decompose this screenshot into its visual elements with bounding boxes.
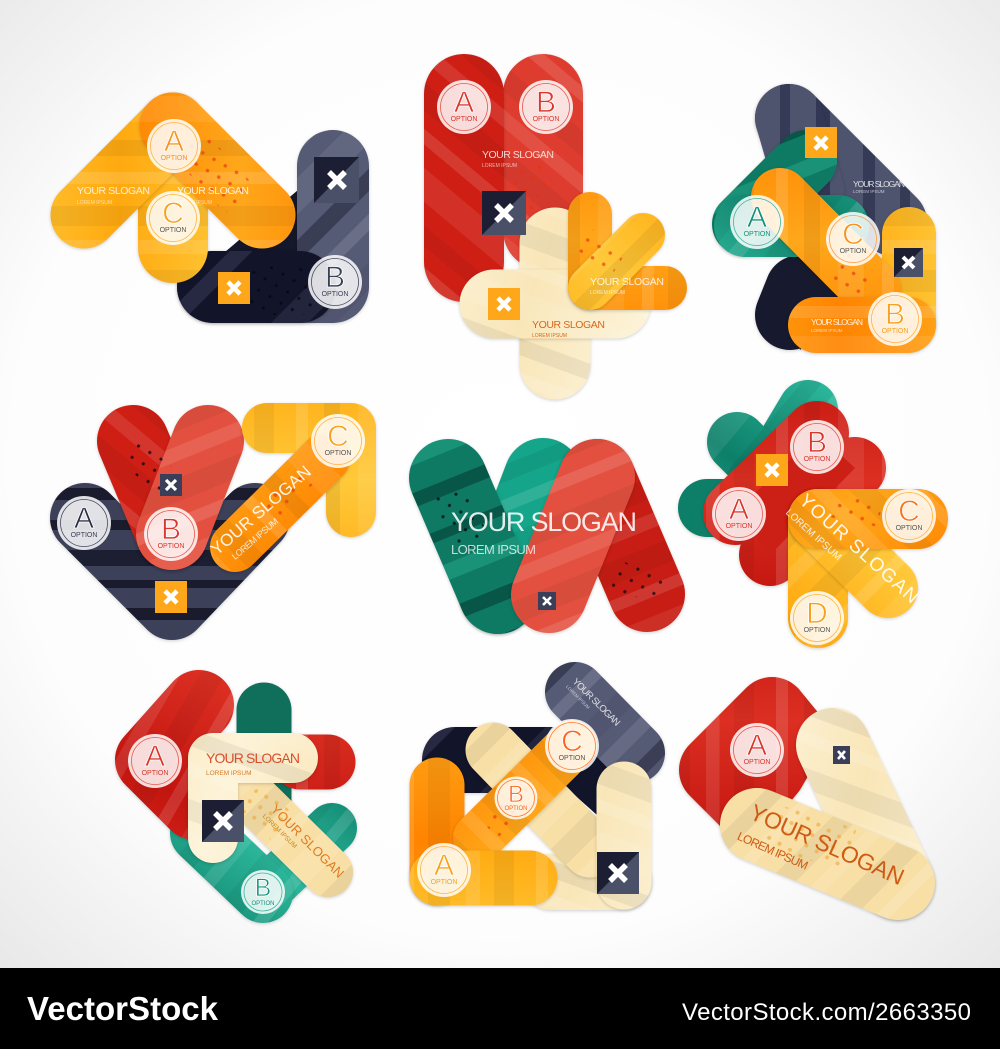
badge B [790,420,844,474]
badge B: B [325,261,345,294]
orange slogan [811,317,863,333]
badge A: A [454,86,474,119]
rotated slogan: LOREM IPSUM [735,829,810,873]
square close icon dark [482,191,526,235]
badge A [730,195,784,249]
badge B: B [255,874,271,902]
orange diagonal [780,197,872,290]
square close icon dark [314,157,359,203]
teal lobes [707,410,808,508]
footer band [0,968,1000,1049]
square close icon dark [160,474,182,496]
dark chevron [85,518,255,605]
rotated slogan: LOREM IPSUM [783,507,843,563]
badge A [730,723,784,777]
orange arrow [585,214,665,288]
dark corner shape [213,166,333,290]
square close icon dark [894,248,923,277]
badge A: A [747,201,767,234]
orange slogan: YOUR SLOGAN [590,276,664,288]
badge B: OPTION [804,456,830,463]
slogan [451,507,637,557]
orange slogan: LOREM IPSUM [590,290,625,296]
badge A: A [145,740,165,773]
badge C: OPTION [896,525,922,532]
badge B: OPTION [882,328,908,335]
footer url: VectorStock.com/2663350 [682,999,971,1026]
rotated slogan: LOREM IPSUM [565,684,591,710]
panel: red pills with cream cross [437,80,665,364]
badge A: OPTION [431,879,457,886]
badge C: C [561,725,583,758]
rotated slogan: YOUR SLOGAN [746,799,908,890]
orange vertical [410,785,464,878]
rotated slogan: YOUR SLOGAN [795,490,922,608]
badge B [241,870,285,914]
badge B: OPTION [158,543,184,550]
badge D [790,591,844,645]
orange arrow head [267,428,351,512]
cream diagonal [493,750,590,850]
slogan: YOUR SLOGAN [206,750,300,766]
badge C [146,191,200,245]
badge C: OPTION [559,755,585,762]
square close icon orange [756,454,788,486]
panel: red heart, dark chevron, orange arrow [57,414,365,613]
orange slogan [590,276,664,296]
slogan: LOREM IPSUM [206,770,252,777]
red slogan: LOREM IPSUM [482,163,517,169]
badge B: B [536,86,556,119]
badge C [826,212,880,266]
badge B: OPTION [322,291,348,298]
panel: teal, red and orange flower [707,410,936,645]
badge A [437,80,491,134]
square close icon dark [538,592,556,610]
badge C: OPTION [160,227,186,234]
badge A: A [747,729,767,762]
panel: red and big cream arrow [715,713,908,910]
footer logo: VectorStock [27,990,219,1027]
badge D: D [806,597,828,630]
red arrow [150,705,199,805]
rotated slogan: YOUR SLOGAN [207,462,315,559]
badge A: OPTION [142,770,168,777]
dark slogan: YOUR SLOGAN [853,179,905,189]
rotated slogan: LOREM IPSUM [261,813,298,850]
badge B: B [161,513,181,546]
badge B [519,80,573,134]
square close icon dark [202,800,244,842]
slogan left: LOREM IPSUM [77,200,112,206]
badge A: OPTION [71,532,97,539]
cream L bar [213,758,293,838]
rotated slogan: LOREM IPSUM [230,516,280,562]
panel: teal and red large slogan [445,477,665,610]
square close icon orange [155,581,187,613]
badge A [128,734,182,788]
badge B: OPTION [533,116,559,123]
teal shapes [200,710,332,893]
red V [130,441,208,534]
rotated slogan: YOUR SLOGAN [268,802,347,881]
red shape [735,433,855,555]
square close icon orange [488,288,520,320]
slogan right: YOUR SLOGAN [177,185,249,197]
teal V [445,477,543,595]
badge A: OPTION [726,523,752,530]
badge A: A [729,493,749,526]
cream slogan [532,319,605,339]
red slogan: YOUR SLOGAN [482,149,554,161]
badge A [417,843,471,897]
badge B: OPTION [504,806,528,812]
badge A: OPTION [451,116,477,123]
panel: mixed bars with orange diagonal [417,676,639,897]
cream shapes [757,745,898,883]
cream diagonal [245,790,328,872]
orange arrow [84,126,262,248]
red peak [549,477,665,595]
slogan right [177,185,249,206]
red shape [715,713,790,800]
cream bars back [550,854,624,910]
panel: red arrow, teal and cream bars [128,705,347,914]
badge C [545,719,599,773]
panel: orange arrow with dark corner [77,119,362,309]
grey diagonal [575,692,635,753]
dark slogan: LOREM IPSUM [853,189,885,194]
badge A: A [434,849,454,882]
badge B: B [885,298,905,331]
slogan left [77,185,150,206]
rotated slogan: YOUR SLOGAN [570,676,622,729]
badge C: C [898,495,920,528]
badge C: C [162,197,184,230]
badge A [147,119,201,173]
badge D: OPTION [804,627,830,634]
panel: dark house with teal and orange [730,118,923,350]
teal shape [743,161,838,226]
badge B: OPTION [251,901,275,907]
badge C: C [842,218,864,251]
slogan right: LOREM IPSUM [177,200,212,206]
orange vertical [882,234,936,322]
square close icon dark [597,852,639,894]
badge C [311,414,365,468]
orange diagonal [478,745,572,838]
square close icon orange [805,127,837,158]
orange slogan: YOUR SLOGAN [811,317,863,327]
cream cross [494,243,616,364]
orange slogan: LOREM IPSUM [811,328,843,333]
square close icon orange [218,272,250,304]
badge C: C [327,420,349,453]
badge A: A [164,125,184,158]
badge B [868,292,922,346]
badge B [308,255,362,309]
badge A: OPTION [744,759,770,766]
badge B: B [508,781,524,808]
orange horizontal [437,850,530,906]
badge A: OPTION [744,231,770,238]
badge C: OPTION [325,450,351,457]
dark slogan [853,179,905,194]
orange arrow [818,505,918,618]
cream slogan: YOUR SLOGAN [532,319,605,331]
square close icon dark [833,746,850,764]
badge B: B [807,426,827,459]
badge A [712,487,766,541]
badge A: A [74,502,94,535]
orange diagonal [235,458,325,547]
cream slogan: LOREM IPSUM [532,333,567,339]
badge B [494,776,538,820]
red bar [300,734,328,790]
badge B [144,507,198,561]
slogan [206,750,300,777]
badge A: OPTION [161,155,187,162]
dark shapes [788,118,893,350]
red slogan [482,149,554,169]
badge C [882,489,936,543]
black shape [455,760,625,815]
orange horizontal [816,297,908,353]
badge A [57,496,111,550]
slogan: LOREM IPSUM [451,542,536,557]
slogan: YOUR SLOGAN [451,507,637,537]
cream vertical [596,789,652,882]
red pills [464,94,543,262]
slogan left: YOUR SLOGAN [77,185,150,197]
badge C: OPTION [840,248,866,255]
